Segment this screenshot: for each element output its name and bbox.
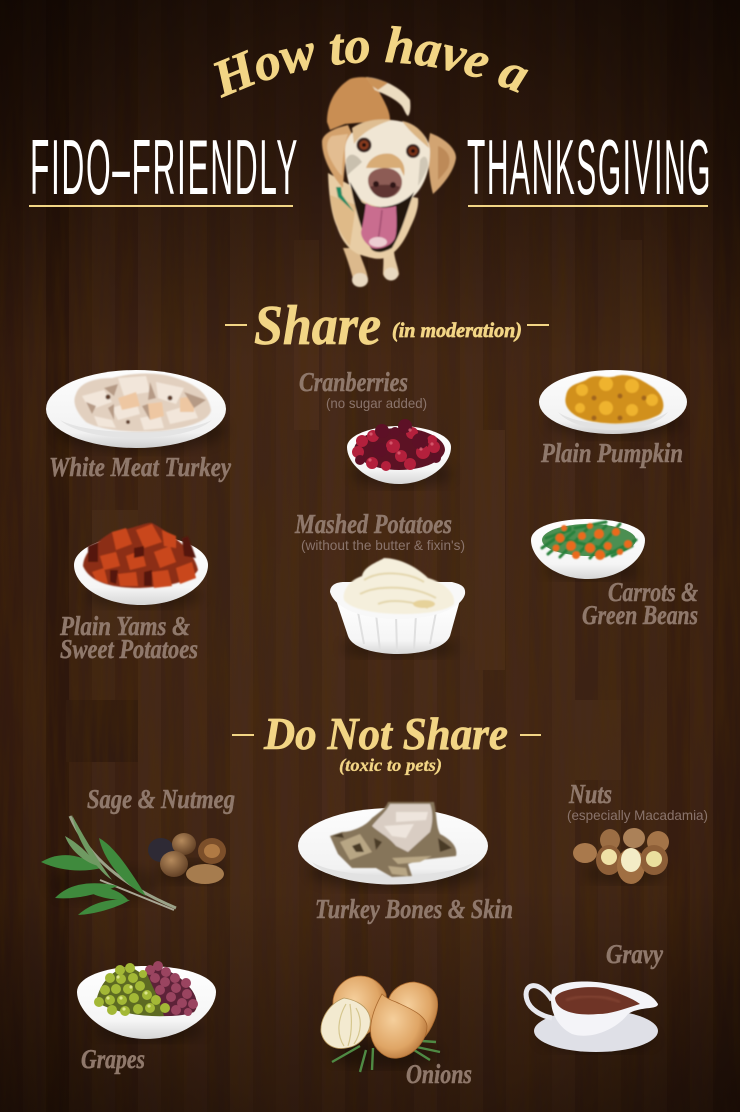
label: Plain Yams and Sweet Potatoes: Plain Yams & <box>59 611 190 641</box>
heading: Share (in moderation): (in moderation) <box>392 318 522 342</box>
food: grapes bowl <box>77 961 216 1042</box>
label: Sage and Nutmeg: Sage & Nutmeg <box>87 784 235 814</box>
food: cranberry bowl <box>347 419 452 488</box>
heading: Share (in moderation) <box>225 295 549 357</box>
label: Carrots and Green Beans: Green Beans <box>582 600 698 630</box>
icon: gravy boat <box>526 982 658 1052</box>
label: Carrots and Green Beans: Carrots & <box>608 577 698 607</box>
label: Gravy: Gravy <box>606 939 664 969</box>
icon: nutmeg <box>148 833 226 884</box>
note: no sugar added: (no sugar added) <box>326 395 427 411</box>
food: white meat turkey plate <box>46 370 226 452</box>
label: Plain Pumpkin: Plain Pumpkin <box>540 438 683 468</box>
icon: dog photo <box>322 77 456 287</box>
icon: macadamia nuts <box>573 828 669 884</box>
food: plain yams bowl <box>74 523 208 608</box>
title: How to have a: How to have a <box>214 26 528 98</box>
label: Carrots and Green Beans <box>582 577 698 630</box>
note: especially Macadamia: (especially Macadamia) <box>567 807 708 823</box>
note: toxic to pets: (toxic to pets) <box>339 755 442 776</box>
icon: sage leaves <box>41 815 176 915</box>
label: Plain Yams and Sweet Potatoes: Sweet Potatoes <box>60 634 198 664</box>
food: mashed potatoes bowl <box>330 558 465 658</box>
label: Turkey Bones and Skin: Turkey Bones & Skin <box>315 894 513 924</box>
note: without the butter and fixin's: (without the butter & fixin's) <box>301 537 465 553</box>
heading: Share (in moderation): Share <box>254 295 381 357</box>
label: Grapes: Grapes <box>81 1044 145 1074</box>
label: Cranberries: Cranberries <box>299 367 408 397</box>
text: FIDO–FRIENDLY <box>30 123 299 211</box>
food: carrots and green beans bowl <box>531 519 645 580</box>
heading: Do Not Share: Do Not Share <box>263 708 508 759</box>
label: Mashed Potatoes: Mashed Potatoes <box>294 509 452 539</box>
label: Nuts: Nuts <box>568 779 612 809</box>
label: White Meat Turkey: White Meat Turkey <box>49 452 232 482</box>
label: Plain Yams and Sweet Potatoes <box>59 611 198 664</box>
food: turkey bones and skin plate <box>298 802 488 890</box>
food: plain pumpkin plate <box>539 370 687 438</box>
icon: onions <box>321 976 440 1072</box>
label: Onions: Onions <box>406 1059 472 1089</box>
